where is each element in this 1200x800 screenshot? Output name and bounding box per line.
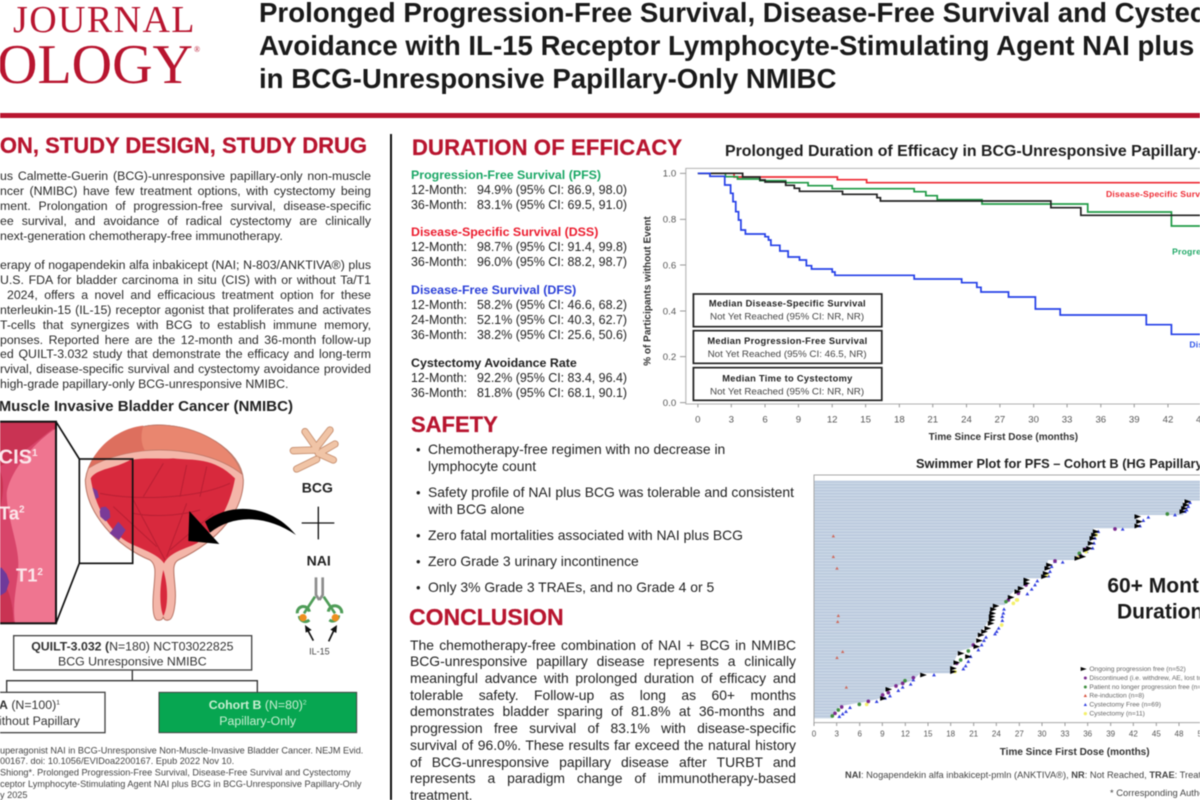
results: progression-free survival xyxy=(410,168,627,212)
x axis tick labels: 21 xyxy=(927,414,938,425)
results: progression-free survival: Progression-Free Survival (PFS) xyxy=(411,168,601,182)
text block: introduction paragraph 1: ncer (NMIBC) have few treatment options, with cystectomy being xyxy=(0,184,371,198)
callout: median disease-specific survival xyxy=(693,294,882,327)
x axis tick labels xyxy=(695,414,1200,425)
y axis tick labels: 0.4 xyxy=(663,306,676,317)
text block: safety bullets: • xyxy=(416,484,421,500)
box: QUILT-3.032 study: BCG Unresponsive NMIBC xyxy=(58,654,207,668)
results: progression-free survival: 94.9% (95% CI: 86.9, 98.0) xyxy=(477,183,627,197)
text block: conclusion: tolerable safety. Follow-up as long as 60+ months xyxy=(410,687,796,703)
callout: median time to cystectomy: Not Yet Reached (95% CI: NR, NR) xyxy=(710,386,864,397)
y axis tick labels xyxy=(663,169,676,409)
title xyxy=(259,0,1200,95)
title: in BCG-Unresponsive Papillary-Only NMIBC xyxy=(259,63,836,94)
results: disease-free survival: 52.1% (95% CI: 40.3, 62.7) xyxy=(477,312,627,326)
x axis tick labels: 30 xyxy=(1038,729,1047,738)
x axis tick labels: 33 xyxy=(1061,729,1070,738)
x axis tick labels: 18 xyxy=(946,729,956,738)
text block: introduction paragraph 2: ed QUILT-3.032 study that demonstrate the efficacy and long-term xyxy=(0,347,371,361)
x axis tick labels: 45 xyxy=(1152,729,1161,738)
references: ceptor Lymphocyte-Stimulating Agent NAI plus BCG in BCG-Unresponsive Papillary-Only xyxy=(0,779,362,789)
panel: tumor stage close-up: 2 xyxy=(19,505,25,516)
x axis tick labels: 15 xyxy=(860,414,871,425)
legend: Ongoing progression free (n=52) xyxy=(1089,666,1186,673)
icon: bladder cross-section xyxy=(85,425,243,620)
box: Cohort A: 1 xyxy=(56,699,60,706)
text block: safety bullets: • xyxy=(416,528,421,542)
swimmer bars xyxy=(814,481,1200,718)
x axis tick labels: 42 xyxy=(1129,729,1138,738)
text block: introduction paragraph 2: T-cells that synergizes with BCG to establish immune memory, xyxy=(0,318,371,332)
x axis tick labels: 39 xyxy=(1106,729,1116,738)
text block: safety bullets: Safety profile of NAI plus BCG was tolerable and consistent xyxy=(428,484,794,500)
text block: conclusion xyxy=(410,637,796,800)
y axis tick labels: 0.2 xyxy=(663,352,676,363)
x axis tick labels: 24 xyxy=(992,729,1001,738)
references: 00167. doi: 10.1056/EVIDoa2200167. Epub 2022 Nov 10. xyxy=(0,756,234,766)
x axis tick labels: 39 xyxy=(1129,414,1140,425)
text block: introduction paragraph 1: ee survival, and avoidance of radical cystectomy are clinically xyxy=(0,214,371,228)
panel: tumor stage close-up: 1 xyxy=(32,448,38,459)
header rule xyxy=(0,113,1200,118)
journal logo: ® xyxy=(194,45,200,54)
label: BCG: BCG xyxy=(302,480,333,496)
diagram: bladder, BCG + NAI, and trial schema xyxy=(0,420,364,800)
panel: tumor stage close-up: 2 xyxy=(37,567,43,578)
references: Shiong*. Prolonged Progression-Free Survival, Disease-Free Survival and Cystectomy xyxy=(0,768,351,778)
text block: conclusion: progression free survival of 83.1% with disease-specific xyxy=(410,720,796,736)
legend: Cystectomy (n=11) xyxy=(1089,711,1145,718)
results: cystectomy avoidance rate: 12-Month: xyxy=(411,370,467,384)
legend: Cystectomy Free (n=69) xyxy=(1089,702,1161,709)
results: disease-free survival: 38.2% (95% CI: 25.6, 50.6) xyxy=(477,328,627,342)
results: disease-free survival: 12-Month: xyxy=(411,298,467,312)
text block: conclusion: demonstrates bladder sparing of 81.8% at 36-months and xyxy=(410,703,796,719)
results: disease-specific survival: 36-Month: xyxy=(411,254,467,268)
y axis tick labels: 1.0 xyxy=(663,169,676,180)
text block: safety bullets: • xyxy=(416,580,421,594)
results: disease-free survival: 58.2% (95% CI: 46.6, 68.2) xyxy=(477,298,627,312)
journal logo xyxy=(0,0,200,96)
text block: safety bullets: Zero Grade 3 urinary incontinence xyxy=(428,552,639,568)
text block: conclusion: survival of 96.0%. These results far exceed the natural history xyxy=(410,737,796,753)
callout: zoom box and connector lines xyxy=(56,422,133,623)
heading: duration of efficacy: DURATION OF EFFICACY xyxy=(412,135,682,160)
text block: conclusion: BCG-unresponsive papillary disease represents a clinically xyxy=(410,653,796,669)
text block: safety bullets: • xyxy=(416,442,421,456)
results: progression-free survival: 36-Month: xyxy=(411,198,467,212)
chart: swimmer plot xyxy=(811,474,1200,758)
text block: safety bullets: Zero fatal mortalities associated with NAI plus BCG xyxy=(428,526,743,542)
heading: introduction, study design, study drug: ON, STUDY DESIGN, STUDY DRUG xyxy=(0,133,367,158)
x axis tick labels: 36 xyxy=(1083,729,1093,738)
text block: introduction paragraph 2: 2024, offers a novel and efficacious treatment option for these xyxy=(7,288,371,302)
references: y 2025 xyxy=(0,790,28,800)
results: disease-specific survival: 98.7% (95% CI: 91.4, 99.8) xyxy=(477,240,627,254)
x axis tick labels: 42 xyxy=(1163,414,1173,425)
x axis tick labels: 21 xyxy=(969,729,979,738)
label: NAI: NAI xyxy=(307,553,331,569)
results: disease-free survival: 36-Month: xyxy=(411,328,467,342)
x axis tick labels: 27 xyxy=(1015,729,1024,738)
callout: median time to cystectomy xyxy=(693,368,882,400)
x axis tick labels: 27 xyxy=(995,414,1005,425)
text block: introduction paragraph 2: high-grade papillary-only BCG-unresponsive NMIBC. xyxy=(0,377,288,391)
text block: introduction paragraph 2: rvival, disease-specific survival and cystectomy avoidance provided xyxy=(0,362,371,376)
curve: disease-free survival xyxy=(698,173,1200,334)
arrow: treatment into bladder xyxy=(188,509,296,544)
text block: conclusion: The chemotherapy-free combination of NAI + BCG in NMIBC xyxy=(410,637,796,653)
x axis tick labels xyxy=(812,729,1200,738)
heading: safety: SAFETY xyxy=(411,412,498,437)
x axis tick labels: 3 xyxy=(729,414,734,425)
text block: introduction paragraph 2: nterleukin-15 (IL-15) receptor agonist that proliferates and activates xyxy=(0,303,371,317)
x axis tick labels: 9 xyxy=(880,729,885,738)
text block: introduction paragraph 1: next-generation chemotherapy-free immunotherapy. xyxy=(0,229,283,243)
results: disease-specific survival xyxy=(410,224,627,270)
results: progression-free survival: 83.1% (95% CI: 69.5, 91.0) xyxy=(477,198,627,212)
callout: median progression-free survival: Not Yet Reached (95% CI: 46.5, NR) xyxy=(708,349,867,360)
text block: safety bullets: with BCG alone xyxy=(428,500,525,516)
callout: median time to cystectomy: Median Time to Cystectomy xyxy=(722,374,853,384)
text block: safety bullets: • xyxy=(416,554,421,568)
panel: tumor stage close-up: T1 xyxy=(16,565,37,586)
box: Cohort A: ithout Papillary xyxy=(0,714,81,728)
box: Cohort B xyxy=(159,692,357,733)
legend: Re-induction (n=8) xyxy=(1089,693,1144,700)
y axis tick labels: 0.8 xyxy=(663,215,676,226)
x axis tick labels: 0 xyxy=(695,414,701,425)
x axis tick labels: 6 xyxy=(762,414,768,425)
callout: median progression-free survival xyxy=(693,331,882,363)
curve: progression-free survival xyxy=(698,173,1200,226)
x axis tick labels: 3 xyxy=(834,729,839,738)
x axis title: Time Since First Dose (months) xyxy=(1000,747,1150,758)
callout: median disease-specific survival: Median Disease-Specific Survival xyxy=(709,299,866,309)
box: Cohort B: 2 xyxy=(303,699,307,706)
x axis tick labels: 18 xyxy=(894,414,905,425)
results: disease-free survival xyxy=(410,282,627,342)
text block: introduction paragraph 2: ponses. Reported here are the 12-month and 36-month follow-up xyxy=(0,333,371,347)
callout: 60+ months duration xyxy=(1107,575,1200,623)
column divider xyxy=(390,134,392,800)
box: Cohort B: Cohort B (N=80) xyxy=(209,698,303,712)
text block: safety bullets xyxy=(416,440,794,596)
markers: cystectomy free xyxy=(838,501,1191,718)
box: Cohort B: Papillary-Only xyxy=(219,714,297,728)
results: disease-specific survival: 12-Month: xyxy=(411,240,467,254)
results: disease-free survival: 24-Month: xyxy=(411,312,467,326)
results: cystectomy avoidance rate: Cystectomy Avoidance Rate xyxy=(411,356,577,370)
panel: tumor stage close-up xyxy=(0,422,56,623)
x axis tick labels: 0 xyxy=(812,729,817,738)
icon: NAI antibody with IL-15 xyxy=(297,577,342,656)
results: disease-specific survival: Disease-Specific Survival (DSS) xyxy=(411,224,598,238)
text block: introduction paragraph 1: ment. Prolongation of progression-free survival, disease-specific xyxy=(0,199,371,213)
results: disease-specific survival: 96.0% (95% CI: 88.2, 98.7) xyxy=(477,254,627,268)
box: QUILT-3.032 study: QUILT-3.032 (N=180) NCT03022825 xyxy=(31,639,234,653)
x axis tick labels: 24 xyxy=(961,414,972,425)
box: Cohort A xyxy=(0,692,105,733)
results: disease-free survival: Disease-Free Survival (DFS) xyxy=(411,282,576,296)
results: cystectomy avoidance rate: 36-Month: xyxy=(411,386,467,400)
text block: introduction paragraph 2 xyxy=(0,258,372,392)
results: cystectomy avoidance rate: 81.8% (95% CI: 68.1, 90.1) xyxy=(477,386,627,400)
curve: cystectomy avoidance xyxy=(698,173,1200,215)
icon: plus sign xyxy=(302,507,334,539)
x axis tick labels: 36 xyxy=(1095,414,1106,425)
text block: introduction paragraph 1 xyxy=(0,169,372,244)
text block: introduction paragraph 2: U.S. FDA for bladder carcinoma in situ (CIS) with or without Ta/T1 xyxy=(0,273,371,287)
markers: ongoing progression free xyxy=(881,500,1190,700)
x axis tick labels: 15 xyxy=(924,729,933,738)
flow: study connector lines xyxy=(7,670,257,692)
text block: conclusion: meaningful advance with prolonged duration of efficacy and xyxy=(410,670,796,686)
x axis tick labels: 33 xyxy=(1062,414,1072,425)
text block: introduction paragraph 1: us Calmette-Guerin (BCG)-unresponsive papillary-only non-muscle xyxy=(0,169,371,183)
curve: disease-specific survival xyxy=(698,173,1200,183)
text block: conclusion: represents a paradigm change of immunotherapy-based xyxy=(410,770,796,786)
text block: safety bullets: Only 3% Grade 3 TRAEs, and no Grade 4 or 5 xyxy=(428,578,714,594)
markers: cystectomy xyxy=(867,535,1096,704)
text block: safety bullets: lymphocyte count xyxy=(428,458,536,474)
text block: conclusion: of BCG-unresponsive papillary disease after TURBT and xyxy=(410,754,796,770)
x axis tick labels: 6 xyxy=(857,729,862,738)
legend xyxy=(1081,666,1200,718)
journal logo: JOURNAL xyxy=(13,0,196,41)
box: QUILT-3.032 study xyxy=(14,636,252,670)
x axis tick labels: 30 xyxy=(1028,414,1039,425)
markers: discontinued xyxy=(835,529,1115,713)
text block: safety bullets: Chemotherapy-free regimen with no decrease in xyxy=(428,440,725,456)
x axis tick labels: 48 xyxy=(1175,729,1184,738)
heading: NMIBC diagram: Muscle Invasive Bladder Cancer (NMIBC) xyxy=(0,398,293,415)
icon: BCG bacteria xyxy=(293,430,335,469)
references: uperagonist NAI in BCG-Unresponsive Non-Muscle-Invasive Bladder Cancer. NEJM Evid. xyxy=(0,746,363,756)
references xyxy=(0,746,363,800)
results: cystectomy avoidance rate xyxy=(410,356,627,400)
text block: introduction paragraph 2: erapy of nogapendekin alfa inbakicept (NAI; N-803/ANKTIVA®) plus xyxy=(0,258,371,272)
y axis tick labels: 0.0 xyxy=(663,398,676,409)
x axis tick labels: 12 xyxy=(827,414,838,425)
y axis tick labels: 0.6 xyxy=(663,260,676,271)
chart: Kaplan-Meier survival curves xyxy=(662,167,1200,443)
callout: median progression-free survival: Median Progression-Free Survival xyxy=(707,336,867,346)
heading: conclusion: CONCLUSION xyxy=(409,604,564,630)
results: cystectomy avoidance rate: 92.2% (95% CI: 83.4, 96.4) xyxy=(477,370,627,384)
markers: re-induction xyxy=(832,534,848,689)
x axis tick labels: 9 xyxy=(796,414,801,425)
results: progression-free survival: 12-Month: xyxy=(411,183,467,197)
y axis label: % of Participants without Event xyxy=(642,216,654,366)
markers: patient no longer progression free xyxy=(832,514,1167,716)
x axis tick labels: 12 xyxy=(901,729,910,738)
journal logo: OLOGY xyxy=(0,34,193,96)
box: Cohort A: A (N=100) xyxy=(0,698,56,712)
icon: NAI antibody with IL-15: IL-15 xyxy=(309,646,330,656)
x axis title: Time Since First Dose (months) xyxy=(929,432,1078,443)
callout: median disease-specific survival: Not Yet Reached (95% CI: NR, NR) xyxy=(710,312,864,323)
